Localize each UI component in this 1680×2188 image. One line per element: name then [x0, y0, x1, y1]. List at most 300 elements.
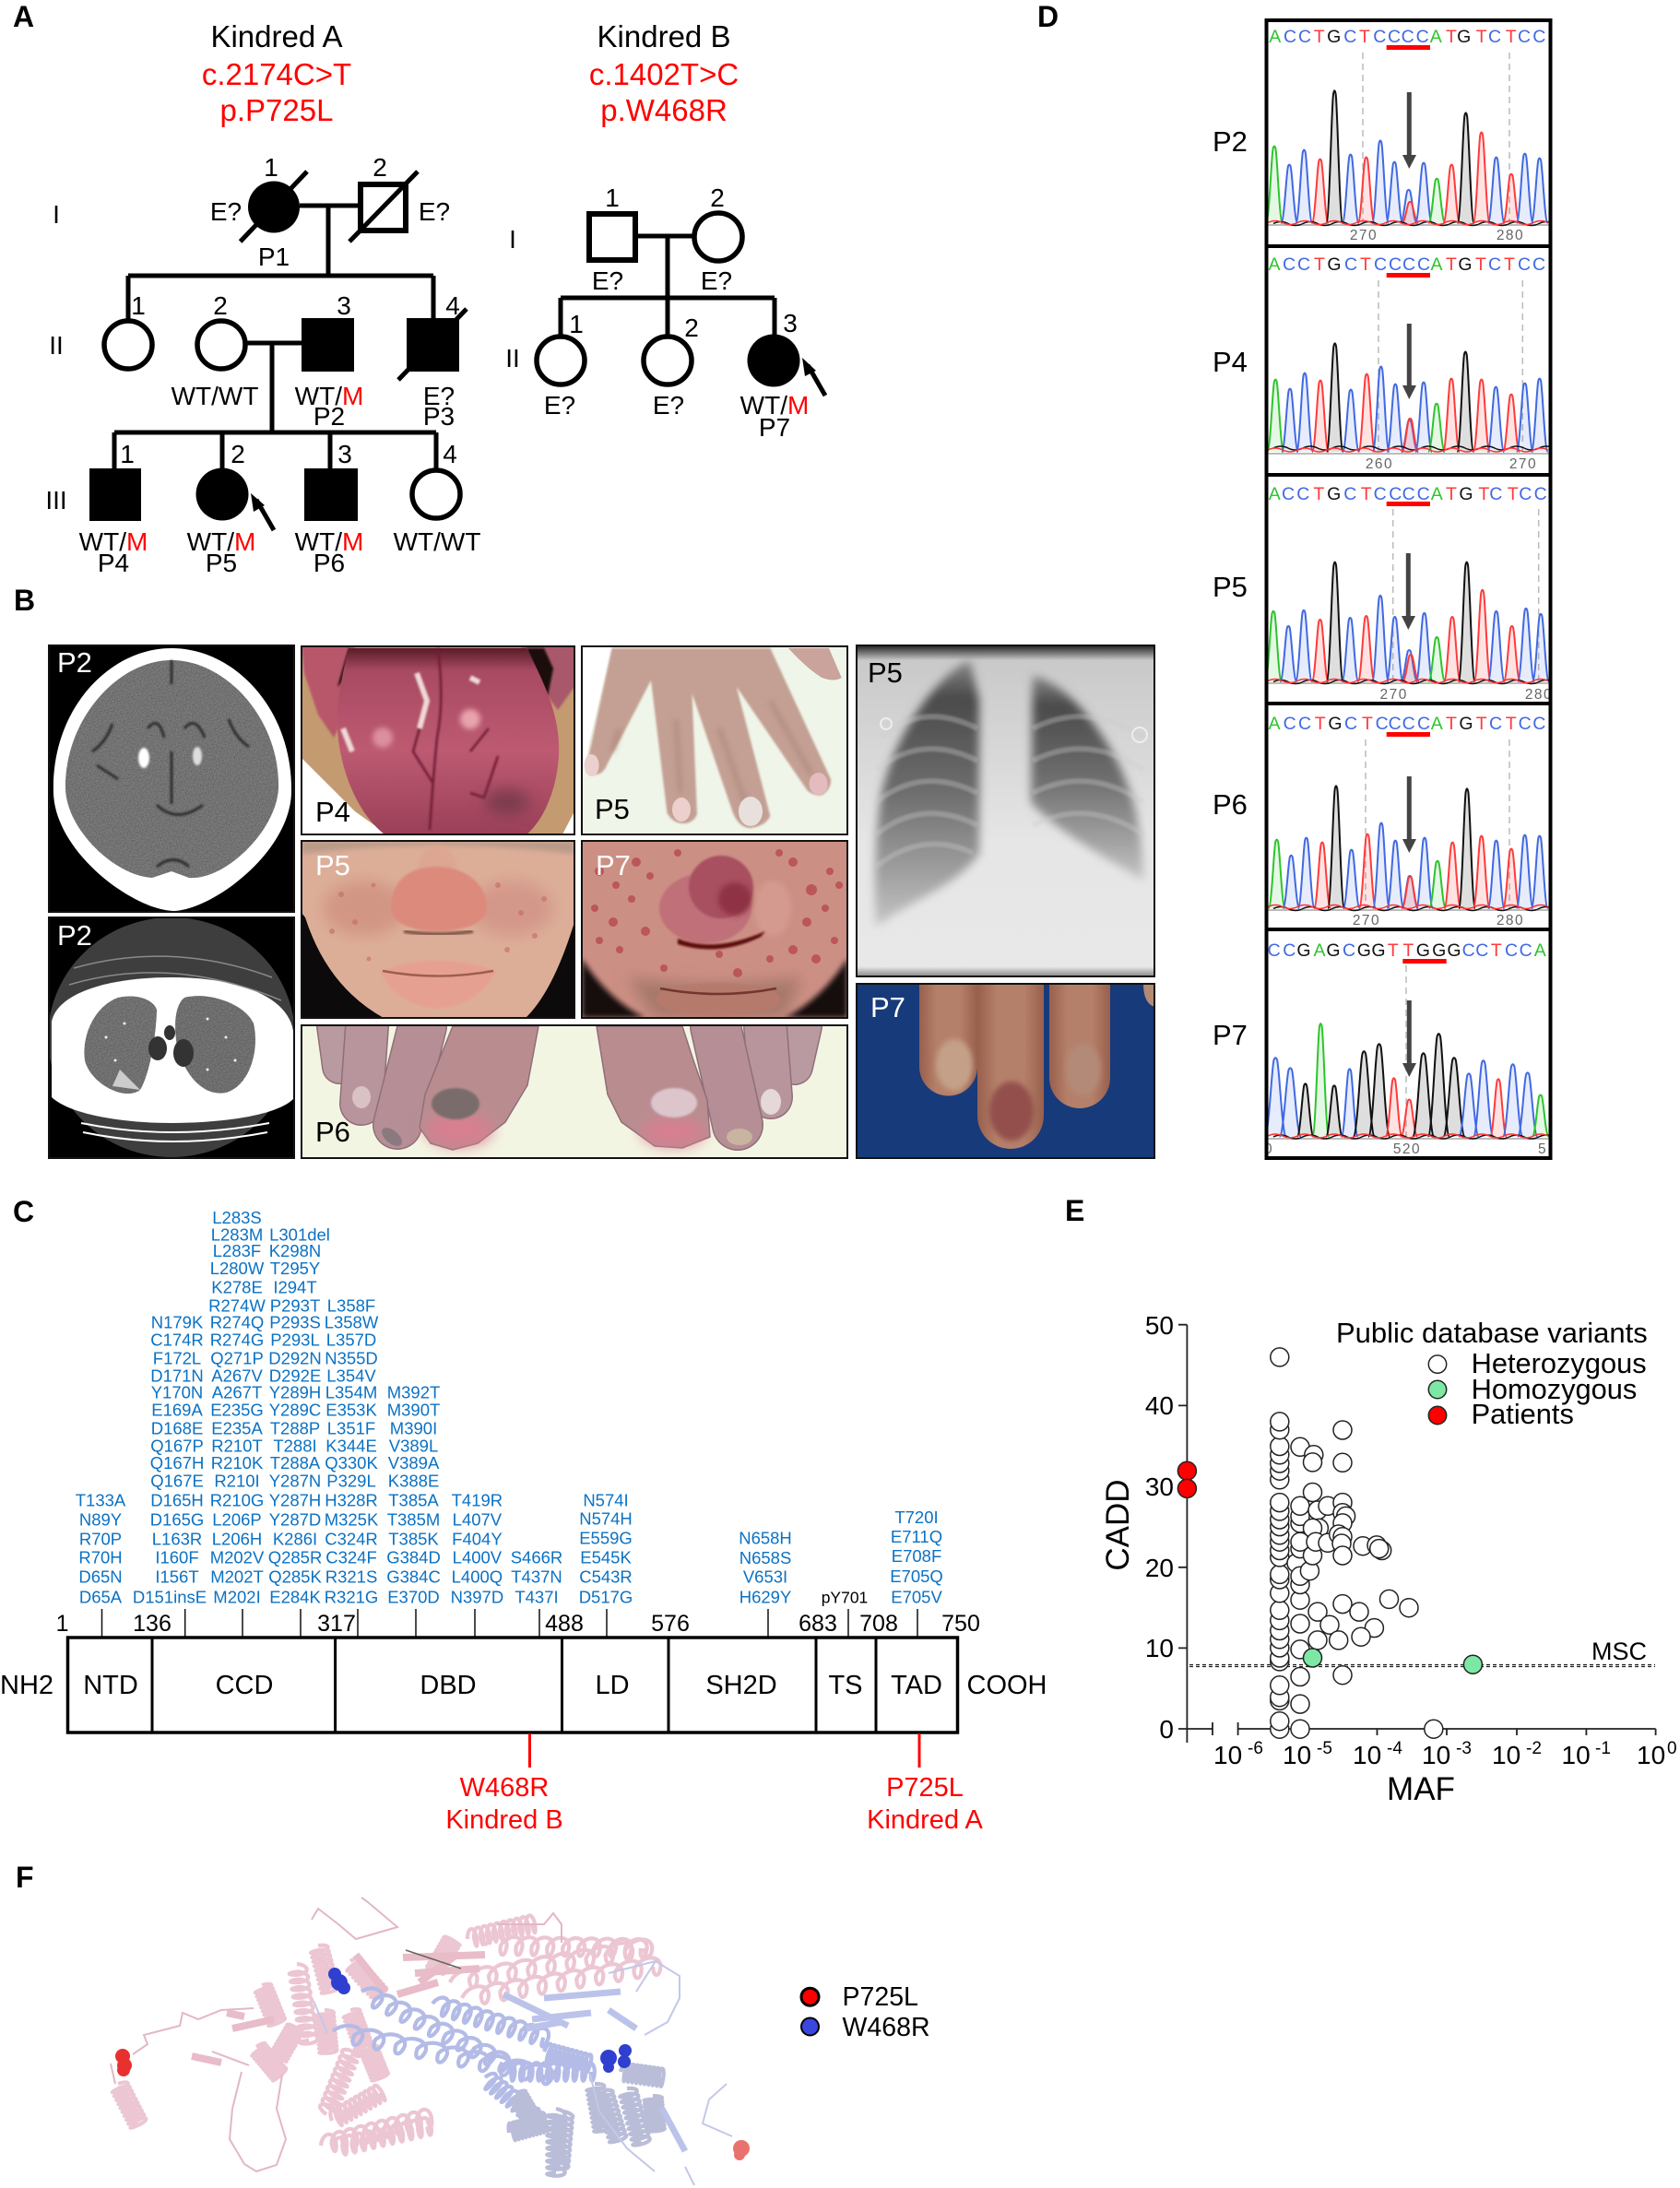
trace P2: ACCTGCTCCCCATG TCTCC — [1269, 27, 1545, 47]
variant list column 2: I160F — [155, 1547, 199, 1567]
x axis: 10 — [1562, 1741, 1591, 1769]
pedigree: Kindred A: WT/M — [187, 527, 255, 556]
domain bar: LD — [595, 1671, 630, 1700]
domain bar: COOH — [966, 1671, 1047, 1700]
residue numbers: 750 — [941, 1611, 980, 1637]
variant list column 7 — [451, 1491, 503, 1607]
legend: residues: P725L — [843, 1982, 918, 2012]
heading: Kindred B: Kindred B — [597, 19, 730, 53]
variant list column 3: L283S — [212, 1208, 262, 1227]
heading: Kindred A: c.2174C>T — [202, 57, 351, 91]
domain bar: SH2D — [705, 1671, 777, 1700]
label P7: P7 — [870, 991, 905, 1023]
pedigree: Kindred A: E? — [210, 197, 242, 226]
variant list column 4: T295Y — [270, 1259, 320, 1278]
label P2: P2 — [57, 919, 92, 952]
image: P2 lung CT — [48, 917, 295, 1158]
pedigree: Kindred B: 2 — [684, 313, 699, 342]
variant list column 7: F404Y — [452, 1529, 503, 1548]
variant list column 5: L358F — [327, 1296, 375, 1316]
pedigree: Kindred B: I — [509, 225, 516, 254]
variant list column 11 — [890, 1508, 943, 1607]
variant list column 4: P293L — [270, 1330, 320, 1349]
domain bar: DBD — [420, 1671, 477, 1700]
pedigree: Kindred A: E? — [423, 382, 455, 410]
variant list column 2: D171N — [150, 1366, 204, 1386]
variant list column 6: K388E — [388, 1472, 439, 1491]
ribbon: pink monomer — [110, 1898, 662, 2171]
pedigree: Kindred A: P5 — [206, 549, 237, 577]
pedigree: Kindred B: 1 — [569, 310, 584, 338]
variant list column 2: C174R — [150, 1330, 204, 1349]
variant list column 4: K298N — [269, 1241, 321, 1260]
pedigree: Kindred A: E? — [419, 197, 450, 226]
variant list column 5: R321G — [325, 1588, 378, 1607]
variant list column 3: Q271P — [210, 1349, 264, 1368]
sample labels: P7 — [1213, 1019, 1248, 1051]
variant list column 6: T385K — [388, 1529, 439, 1548]
trace P4: 270 — [1509, 456, 1537, 472]
variant list column 6: V389A — [388, 1453, 440, 1472]
x axis: 10 — [1492, 1741, 1520, 1769]
variant list column 5: L354M — [325, 1382, 377, 1402]
variant list column 6: M390T — [387, 1400, 440, 1419]
pedigree: Kindred A: 2 — [373, 153, 387, 182]
variant list column 8: S466R — [511, 1547, 562, 1567]
x axis: -3 — [1456, 1739, 1472, 1758]
variant list column 4: Y287H — [269, 1491, 321, 1510]
variant list column 4: L301del — [269, 1224, 330, 1244]
variant list column 11: E711Q — [891, 1527, 942, 1546]
residue numbers: 708 — [859, 1611, 898, 1637]
pedigree: Kindred A: 1 — [131, 291, 146, 320]
trace P6: 280 — [1497, 913, 1524, 928]
residue spheres: W468R right — [600, 2044, 632, 2073]
variant list column 2: D165H — [150, 1491, 204, 1510]
tick marks — [101, 1609, 917, 1638]
variant list column 9: E559G — [579, 1529, 633, 1548]
residue numbers: 1 — [56, 1611, 69, 1637]
variant list column 5: L354V — [326, 1366, 376, 1386]
variant list column 4: P293T — [270, 1296, 320, 1316]
residue spheres: P725L — [115, 2049, 132, 2076]
legend: Public database variants — [1336, 1317, 1648, 1349]
variant list column 9: N574H — [579, 1509, 633, 1529]
scatter points patients — [1177, 1461, 1196, 1497]
domain bar: NTD — [83, 1671, 138, 1700]
variant list column 5: L358W — [325, 1312, 379, 1331]
legend: Homozygous — [1472, 1373, 1637, 1405]
trace P7: 0 — [1264, 1141, 1273, 1157]
variant list column 1: D65N — [78, 1567, 123, 1587]
pedigree: Kindred B: E? — [653, 391, 684, 420]
heading: Kindred B: p.W468R — [600, 93, 728, 127]
variant list column 3: R210T — [211, 1436, 263, 1455]
variant list column 5: H328R — [325, 1491, 378, 1510]
variant list column 7: T419R — [452, 1491, 503, 1510]
variant list column 1: T133A — [76, 1491, 126, 1510]
variant list column 1 — [76, 1491, 126, 1607]
y axis: 10 — [1145, 1634, 1174, 1662]
variant list column 9: N574I — [583, 1491, 629, 1510]
pedigree: Kindred A: WT/WT — [172, 382, 258, 410]
pedigree: Kindred A: 3 — [337, 440, 352, 468]
variant list column 2: N179K — [151, 1312, 204, 1331]
variant list column 2: F172L — [153, 1349, 201, 1368]
panel E: CADD vs MAF scatter — [1065, 1194, 1677, 1807]
image: P2 brain CT — [49, 645, 294, 912]
variant list column 3: A267V — [211, 1366, 263, 1386]
trace P7 — [1264, 940, 1554, 1157]
variant list column 5: M325K — [325, 1510, 379, 1530]
variant list column 3: M202I — [213, 1588, 261, 1607]
pedigree: Kindred A: 4 — [443, 440, 457, 468]
trace P6: ACCTGC TCCCCATGTCTCC — [1268, 714, 1545, 734]
chromatogram traces — [1264, 27, 1554, 1157]
panel C: STAT1 domain map — [0, 1195, 1047, 1835]
residue numbers: 136 — [133, 1611, 172, 1637]
legend: Patients — [1472, 1398, 1574, 1430]
variant list column 4: Q285K — [268, 1567, 322, 1587]
variant list column 2: D168E — [151, 1418, 203, 1437]
variant list column 2: Y170N — [151, 1382, 203, 1402]
MSC threshold line: MSC — [1591, 1638, 1647, 1665]
x axis: -1 — [1595, 1739, 1611, 1758]
x axis: -2 — [1526, 1739, 1542, 1758]
x axis: 0 — [1667, 1739, 1677, 1758]
variant list column 6 — [386, 1382, 441, 1607]
domain bar: NH2 — [0, 1671, 53, 1700]
variant list column 5: L357D — [326, 1330, 376, 1349]
variant list column 3: R210G — [210, 1491, 264, 1510]
pedigree: Kindred B: 2 — [710, 183, 725, 212]
variant list column 5: Q330K — [325, 1453, 378, 1472]
trace P5: 280 — [1525, 687, 1553, 703]
variant list column 5: N355D — [325, 1349, 378, 1368]
variant list column 4: Y287D — [269, 1510, 321, 1530]
pedigree: Kindred B: P7 — [759, 413, 790, 442]
residue numbers: 317 — [317, 1611, 356, 1637]
variant list column 4: P293S — [269, 1312, 321, 1331]
variant list column 1: D65A — [79, 1588, 123, 1607]
variant list column 4: T288I — [273, 1436, 317, 1455]
variant list column 10: N658S — [739, 1548, 791, 1567]
pedigree: Kindred A: WT/M — [295, 382, 363, 410]
image: P5 face — [302, 841, 574, 1018]
variant list column 11: E705V — [891, 1588, 942, 1607]
variant list column 3: R210I — [214, 1472, 260, 1491]
variant list column 4: I294T — [273, 1278, 317, 1297]
residue spheres: P725L pale — [733, 2140, 750, 2160]
variant list column 1: N89Y — [79, 1510, 122, 1530]
mutation callout W468R: Kindred B — [445, 1805, 563, 1835]
panel letter B: B — [14, 584, 35, 617]
pedigree: Kindred A: I — [53, 200, 60, 229]
variant list column 2: I156T — [155, 1567, 199, 1587]
variant list column 6: M390I — [390, 1418, 437, 1437]
label P5: P5 — [868, 656, 903, 689]
label P5: P5 — [595, 793, 630, 825]
variant list column 2 — [133, 1312, 207, 1607]
variant list column 10: V653I — [743, 1567, 787, 1587]
variant list column 11: E705Q — [890, 1567, 943, 1586]
pedigree: Kindred A: P4 — [98, 549, 129, 577]
y axis: 40 — [1145, 1391, 1174, 1420]
y axis: 30 — [1145, 1472, 1174, 1501]
label P6: P6 — [315, 1116, 350, 1148]
variant list column 8: T437N — [511, 1567, 562, 1587]
variant list column 4 — [268, 1224, 330, 1607]
pedigree: Kindred B: E? — [592, 266, 623, 295]
pedigree: Kindred B: E? — [701, 266, 732, 295]
variant list column 3: M202V — [210, 1547, 265, 1567]
sample labels: P5 — [1213, 571, 1248, 603]
variant list column 6: T385A — [388, 1491, 439, 1510]
variant list column 5 — [325, 1296, 379, 1607]
variant list column 6: G384D — [386, 1547, 441, 1567]
domain bar: CCD — [216, 1671, 273, 1700]
x axis: 10 — [1422, 1741, 1450, 1769]
ribbon: blue monomer — [314, 1961, 732, 2185]
panel letter D: D — [1037, 0, 1059, 33]
mutation callout W468R — [445, 1733, 563, 1835]
variant list column 10 — [739, 1529, 792, 1607]
x axis: 10 — [1213, 1741, 1242, 1769]
variant list column 1: R70P — [79, 1529, 122, 1548]
legend: residues — [801, 1982, 930, 2042]
variant list column 3: L206P — [212, 1510, 262, 1530]
label P7: P7 — [596, 849, 631, 881]
pedigree: Kindred A: 4 — [445, 291, 460, 320]
mutation callout P725L: Kindred A — [867, 1805, 984, 1835]
variant list column 8: T437I — [515, 1588, 559, 1607]
sample labels: P2 — [1213, 125, 1248, 158]
panel letter F: F — [16, 1861, 34, 1894]
variant list column 2: Q167E — [150, 1472, 204, 1491]
variant list column 2: Q167P — [150, 1436, 204, 1455]
variant list column 5: C324R — [325, 1529, 378, 1548]
image: P4 tongue — [302, 646, 574, 834]
image frames — [49, 645, 1154, 1158]
mutation callout P725L — [867, 1733, 984, 1835]
trace P4: 260 — [1366, 456, 1393, 472]
variant list column 4: T288A — [270, 1453, 321, 1472]
x axis: -6 — [1248, 1739, 1263, 1758]
domain bar — [0, 1638, 1047, 1733]
pedigree: Kindred A: WT/M — [79, 527, 148, 556]
variant list column 3 — [208, 1208, 266, 1607]
pedigree: Kindred A: 2 — [213, 291, 228, 320]
variant list column 2: E169A — [151, 1400, 203, 1419]
trace P6: 270 — [1353, 913, 1380, 928]
legend: Heterozygous — [1472, 1347, 1647, 1379]
y axis: 50 — [1145, 1311, 1174, 1340]
pedigree: Kindred B: E? — [544, 391, 575, 420]
y axis: 20 — [1145, 1554, 1174, 1582]
y axis: 0 — [1159, 1715, 1174, 1744]
variant list column 6: T385M — [387, 1510, 440, 1530]
trace P5: ACCTGCTCCCCATG TC TCC — [1269, 484, 1547, 504]
variant list column 3: L283F — [213, 1241, 261, 1260]
panel letter E: E — [1065, 1194, 1084, 1227]
scatter points heterozygous — [1271, 1348, 1443, 1738]
pedigree: Kindred A: P3 — [423, 402, 455, 431]
variant list column 3: L206H — [212, 1529, 262, 1548]
residue numbers: 488 — [545, 1611, 584, 1637]
sample labels — [1213, 125, 1248, 1051]
variant list column 4: D292N — [268, 1349, 322, 1368]
variant list column 3: R274W — [208, 1296, 266, 1316]
variant list column 4: E284K — [269, 1588, 321, 1607]
mutation callout P725L: P725L — [886, 1773, 964, 1803]
legend — [1336, 1317, 1648, 1430]
y axis title: CADD — [1100, 1479, 1136, 1571]
residue spheres: W468R left — [328, 1968, 350, 1994]
variant list column 4: D292E — [269, 1366, 321, 1386]
pedigree: Kindred B: II — [505, 344, 520, 373]
variant list column 8 — [511, 1547, 562, 1607]
pedigree: Kindred B: WT/M — [740, 391, 809, 420]
image: P7 fingers — [857, 977, 1154, 1158]
trace P7: CCGAGCGGTTGGGCCTCCA — [1268, 940, 1546, 961]
residue numbers: 576 — [651, 1611, 690, 1637]
pedigree: Kindred A: WT/M — [295, 527, 363, 556]
variant list column 7: L400Q — [452, 1567, 503, 1587]
variant list column 7: N397D — [451, 1588, 503, 1607]
pedigree: Kindred A: P6 — [314, 549, 345, 577]
trace P5: 270 — [1380, 687, 1408, 703]
variant list column 9 — [579, 1491, 633, 1607]
variant list column 3: L283M — [211, 1224, 263, 1244]
variant list column 9: C543R — [579, 1567, 633, 1587]
variant list column 4: Y289C — [269, 1400, 321, 1419]
panel A: pedigrees — [13, 0, 825, 577]
x axis: 10 — [1637, 1741, 1665, 1769]
trace P2 — [1266, 27, 1554, 243]
variant list column 5: R321S — [325, 1567, 377, 1587]
variant list column 1: R70H — [78, 1547, 123, 1567]
variant list column 9: E545K — [580, 1547, 632, 1567]
variant list column 10: N658H — [739, 1529, 792, 1548]
pedigree: Kindred A — [45, 153, 480, 577]
variant list column 3: E235G — [210, 1400, 264, 1419]
residue numbers: 683 — [799, 1611, 837, 1637]
trace P7: 5 — [1538, 1141, 1547, 1157]
variant list column 3: R274Q — [210, 1312, 264, 1331]
variant list column 7: L407V — [453, 1510, 503, 1530]
trace P6 — [1268, 714, 1554, 928]
pedigree: Kindred A: III — [45, 486, 67, 514]
variant list column 3: R274G — [210, 1330, 264, 1349]
variant list column 2: Q167H — [150, 1453, 204, 1472]
pedigree: Kindred A: WT/WT — [394, 527, 480, 556]
y axis — [1145, 1311, 1187, 1744]
variant list column 5: E353K — [325, 1400, 377, 1419]
variant list column 5: C324F — [325, 1547, 377, 1567]
variant list column 10: H629Y — [739, 1588, 791, 1607]
trace P4: ACCTGCTCCCCATGTCTCC — [1268, 254, 1545, 275]
variant list column 3: R210K — [211, 1453, 264, 1472]
variant list column 4: K286I — [273, 1529, 317, 1548]
pedigree: Kindred B: 1 — [605, 183, 620, 212]
scatter points homozygous — [1304, 1649, 1482, 1674]
variant list column 4: T288P — [270, 1418, 320, 1437]
variant list column 2: D151insE — [133, 1588, 207, 1607]
variant list column 6: G384C — [386, 1567, 441, 1587]
chromatogram frames — [1267, 20, 1551, 1158]
trace P7: 520 — [1393, 1141, 1421, 1157]
heading: Kindred B: c.1402T>C — [589, 57, 739, 91]
domain bar: TS — [828, 1671, 863, 1700]
mutation callout W468R: W468R — [460, 1773, 549, 1803]
sample labels: P4 — [1213, 346, 1248, 378]
label pY701: pY701 — [822, 1589, 868, 1607]
image: P5 hand — [582, 646, 847, 834]
panel F: protein structure — [16, 1861, 930, 2185]
variant list column 3: E235A — [211, 1418, 263, 1437]
image: P7 face — [582, 841, 847, 1018]
pedigree: Kindred A: II — [49, 331, 64, 360]
variant list column 4: Y287N — [269, 1472, 321, 1491]
trace P2: 280 — [1497, 228, 1524, 243]
image: P6 toes — [302, 1025, 847, 1158]
pedigree: Kindred A: 1 — [264, 153, 278, 182]
pedigree: Kindred A: P1 — [258, 242, 290, 271]
variant list column 2: L163R — [152, 1529, 202, 1548]
x axis: -5 — [1317, 1739, 1332, 1758]
panel letter C: C — [13, 1195, 34, 1228]
label P2: P2 — [57, 646, 92, 679]
pedigree: Kindred A: 2 — [231, 440, 245, 468]
domain bar: TAD — [891, 1671, 942, 1700]
panel letter A: A — [13, 0, 34, 33]
variant list column 2: D165G — [150, 1510, 204, 1530]
pedigree: Kindred A: 1 — [120, 440, 135, 468]
x axis: 10 — [1353, 1741, 1381, 1769]
variant list column 9: D517G — [579, 1588, 633, 1607]
label P5: P5 — [315, 849, 350, 881]
variant list column 3: L280W — [210, 1259, 265, 1278]
trace P4 — [1267, 254, 1554, 472]
x axis title: MAF — [1387, 1771, 1455, 1807]
variant list column 4: Y289H — [269, 1382, 321, 1402]
variant list column 11: E708F — [892, 1546, 941, 1566]
label P4: P4 — [315, 796, 350, 828]
x axis: 10 — [1283, 1741, 1311, 1769]
image: P5 chest X-ray — [857, 645, 1154, 976]
sample labels: P6 — [1213, 788, 1248, 821]
variant list column 6: M392T — [387, 1382, 440, 1402]
heading: Kindred A: Kindred A — [210, 19, 343, 53]
variant list column 4: Q285R — [268, 1547, 322, 1567]
variant list column 11: T720I — [894, 1508, 939, 1527]
residue numbers — [56, 1611, 980, 1637]
variant list column 5: P329L — [326, 1472, 376, 1491]
pedigree: Kindred A: 3 — [337, 291, 351, 320]
trace P5 — [1265, 484, 1554, 703]
pedigree: Kindred B: 3 — [783, 309, 798, 337]
trace P2: 270 — [1350, 228, 1378, 243]
heading: Kindred A: p.P725L — [220, 93, 333, 127]
variant list column 5: L351F — [327, 1418, 375, 1437]
x axis: -4 — [1387, 1739, 1402, 1758]
variant list column 7: L400V — [453, 1547, 503, 1567]
x axis — [1187, 1722, 1677, 1769]
variant list column 6: E370D — [387, 1588, 440, 1607]
variant list column 3: K278E — [211, 1278, 263, 1297]
legend: residues: W468R — [843, 2013, 930, 2042]
variant list column 3: M202T — [210, 1567, 264, 1587]
